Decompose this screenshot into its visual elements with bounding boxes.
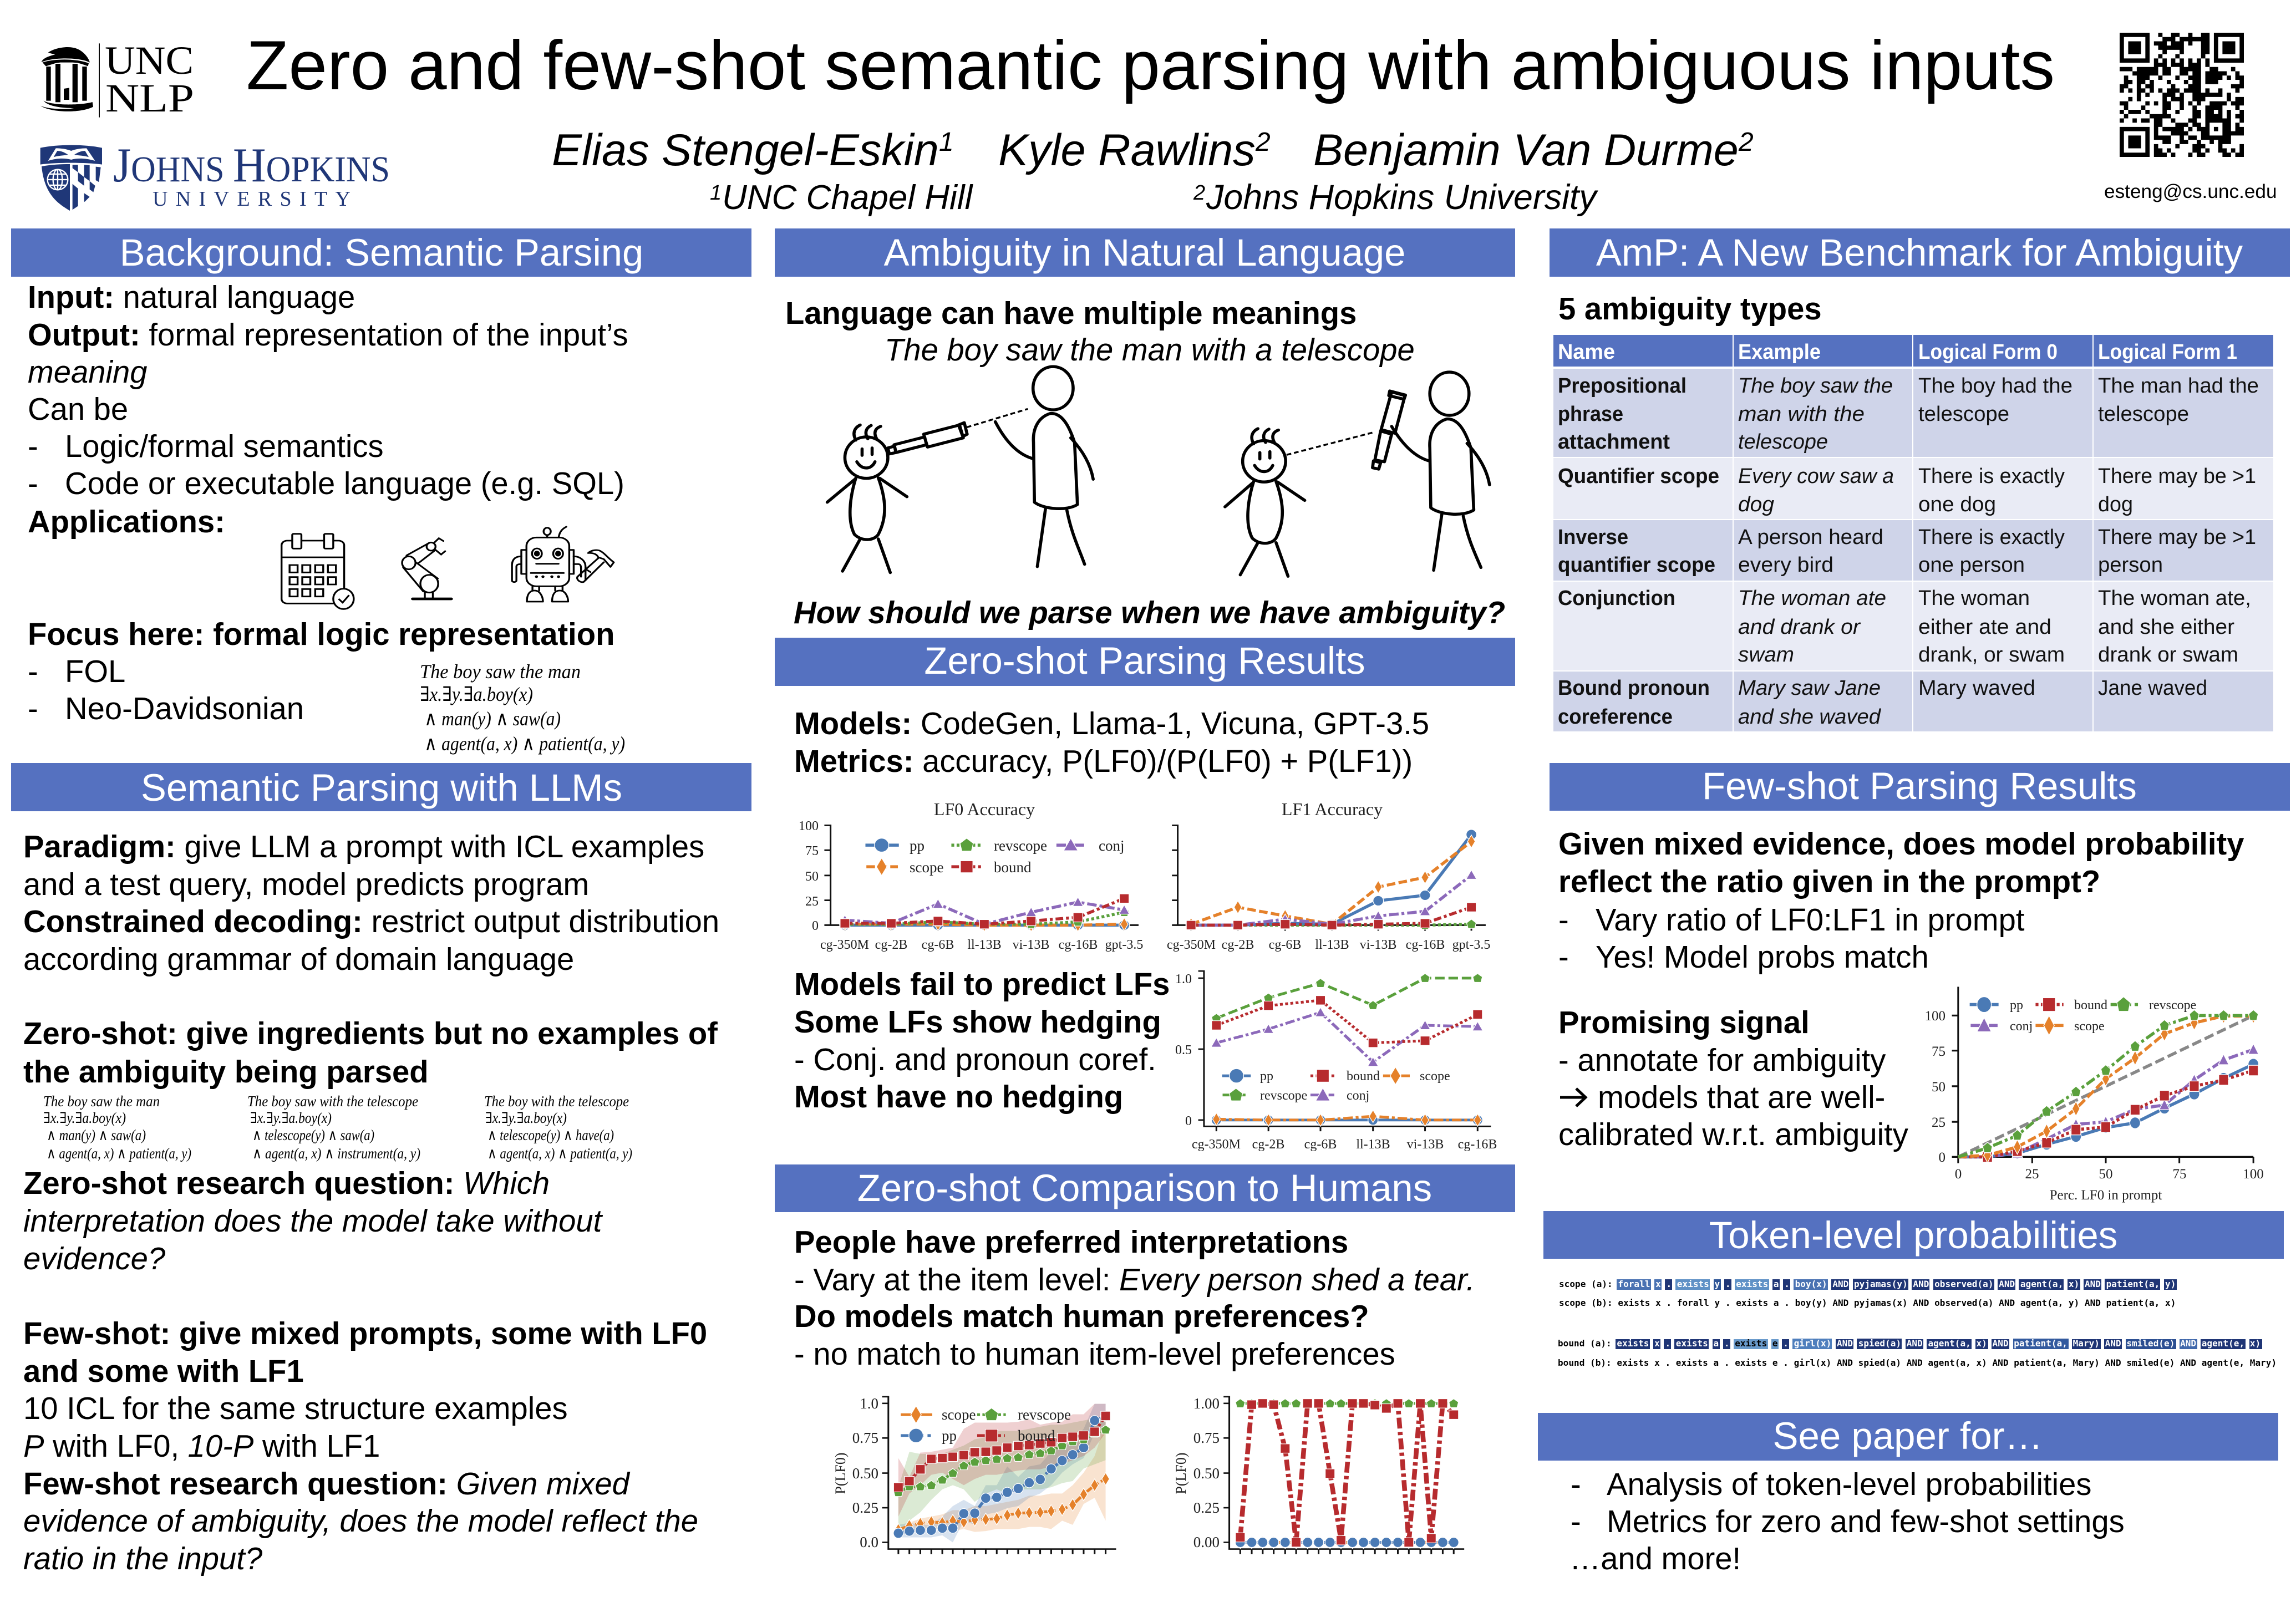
text: multiple meanings: Language can have multiple meanings xyxy=(785,296,1357,330)
chart: LF1 accuracy: ll-13B xyxy=(1315,938,1349,952)
chart: LF0 accuracy: ll-13B xyxy=(967,938,1002,952)
chart: LF1 accuracy: gpt-3.5 xyxy=(1452,938,1490,952)
table: ambiguity types: Mary waved xyxy=(1918,677,2035,700)
text block: research questions: ratio in the input? xyxy=(23,1541,263,1576)
text: list xyxy=(1569,1467,2125,1576)
text: mixed evidence question: Yes! Model probs match xyxy=(1596,939,1929,974)
table: ambiguity types: dog xyxy=(2098,493,2133,516)
chart: P(LF0) by item, single model xyxy=(1173,1395,1464,1554)
chart: hedging by model: 0.5 xyxy=(1175,1043,1192,1057)
text: models and metrics: Metrics: accuracy, P(LF0)/(P(LF0) + P(LF1)) xyxy=(794,744,1413,779)
chart: hedging by model: cg-6B xyxy=(1304,1137,1337,1152)
text block: paradigm: according grammar of domain language xyxy=(23,942,574,976)
formula: logical form: ∃x.∃y.∃a.boy(x) xyxy=(420,683,533,705)
chart: few-shot probability vs ratio: Perc. LF0 in prompt xyxy=(2050,1188,2162,1203)
heading: AmP: AmP: A New Benchmark for Ambiguity xyxy=(1596,231,2243,274)
text: mixed evidence question: Vary ratio of LF0:LF1 in prompt xyxy=(1596,902,2025,937)
heading: Semantic Parsing with LLMs: Semantic Parsing with LLMs xyxy=(141,766,622,809)
text block: zero-shot: Zero-shot: give ingredients but no examples of xyxy=(23,1016,718,1051)
table: ambiguity types: person xyxy=(2098,553,2163,577)
table: ambiguity types: and drank or xyxy=(1738,616,1861,639)
heading: Zero-shot Parsing Results: Zero-shot Parsing Results xyxy=(924,639,1365,682)
authors: 1 xyxy=(939,128,954,157)
text block: research questions: interpretation does the model take without xyxy=(23,1203,603,1238)
affiliations: Johns Hopkins University xyxy=(1206,178,1598,217)
token heatmap: bound examples: bound (a): exists x . exists a . exists e . girl(x) AND spied(a) AND agent(a, x) AND patient(a, Mary) AND smiled(e) AND agent(e, x) xyxy=(1558,1338,2261,1349)
heading: Semantic Parsing with LLMs xyxy=(11,763,751,811)
logo: UNC NLP: NLP xyxy=(105,76,194,120)
token heatmap: scope examples xyxy=(1559,1279,2177,1308)
table: ambiguity types: The boy had the xyxy=(1918,374,2073,398)
chart: P(LF0) by item, averaged: bound xyxy=(1018,1427,1055,1444)
icon: calendar xyxy=(282,534,354,609)
chart: P(LF0) by item, single model: P(LF0) xyxy=(1173,1452,1189,1494)
table: ambiguity types: Mary saw Jane xyxy=(1738,677,1881,700)
table: ambiguity types: drank, or swam xyxy=(1918,643,2065,667)
table: ambiguity types: man with the xyxy=(1738,403,1865,426)
logo: Johns Hopkins University xyxy=(40,139,390,211)
logo: Johns Hopkins University: JOHNS HOPKINS xyxy=(113,139,390,192)
token heatmap: bound examples xyxy=(1558,1338,2277,1368)
authors: Kyle Rawlins xyxy=(998,125,1256,175)
chart: few-shot probability vs ratio: 0 xyxy=(1939,1150,1945,1165)
text: findings: Most have no hedging xyxy=(794,1079,1123,1114)
chart: hedging by model: conj xyxy=(1347,1089,1369,1103)
chart: few-shot probability vs ratio: 75 xyxy=(1932,1044,1945,1059)
text: promising signal: calibrated w.r.t. ambiguity xyxy=(1558,1117,1908,1152)
chart: P(LF0) by item, averaged: 0.25 xyxy=(852,1499,878,1516)
heading: Comparison to Humans xyxy=(775,1164,1515,1212)
table: ambiguity types: drank or swam xyxy=(2098,643,2238,667)
chart: LF0 accuracy: 100 xyxy=(799,819,819,833)
table: ambiguity types: Example xyxy=(1738,340,1821,364)
icon: robot with hammer xyxy=(512,527,614,602)
heading: See paper for: See paper for… xyxy=(1772,1415,2043,1457)
chart: LF1 accuracy: cg-2B xyxy=(1222,938,1254,952)
formulas: three logical forms: ∧ agent(a, x) ∧ patient(a, y) xyxy=(47,1145,191,1162)
text: promising signal xyxy=(1558,1005,1908,1152)
text: mixed evidence question: reflect the ratio given in the prompt? xyxy=(1558,864,2100,899)
table: ambiguity types: phrase xyxy=(1558,403,1623,426)
text block: focus xyxy=(28,617,614,726)
table: ambiguity types: Inverse xyxy=(1558,526,1628,549)
text block: definitions: Can be xyxy=(28,391,128,426)
chart: LF0 accuracy: 0 xyxy=(812,919,819,933)
text: preferences xyxy=(794,1224,1475,1371)
text block: research questions xyxy=(23,1166,707,1576)
chart: LF0 accuracy: gpt-3.5 xyxy=(1105,938,1143,952)
table: ambiguity types: one dog xyxy=(1918,493,1996,516)
formulas: three logical forms: ∃x.∃y.∃a.boy(x) xyxy=(485,1110,567,1126)
chart: few-shot probability vs ratio xyxy=(1924,986,2264,1203)
affiliations: 1 xyxy=(710,181,722,205)
text: mixed evidence question: Given mixed evidence, does model probability xyxy=(1558,826,2244,861)
table: ambiguity types: attachment xyxy=(1558,430,1670,454)
table: ambiguity types: Name xyxy=(1558,340,1615,364)
formulas: three logical forms xyxy=(43,1093,632,1162)
table: ambiguity types: Logical Form 0 xyxy=(1918,340,2058,364)
formulas: three logical forms: ∧ agent(a, x) ∧ instrument(a, y) xyxy=(252,1145,420,1162)
text: mixed evidence question: - xyxy=(1558,939,1569,974)
chart: few-shot probability vs ratio: 50 xyxy=(1932,1080,1945,1095)
heading: Background: Background: Semantic Parsing xyxy=(120,231,643,274)
text: preferences: People have preferred interpretations xyxy=(794,1224,1348,1259)
chart: hedging by model: 1.0 xyxy=(1175,972,1192,986)
affiliations: 2 xyxy=(1193,181,1205,205)
text: models and metrics: Models: CodeGen, Llama-1, Vicuna, GPT-3.5 xyxy=(794,706,1429,741)
table: ambiguity types: Bound pronoun xyxy=(1558,677,1710,700)
authors: 2 xyxy=(1255,128,1271,157)
text block: focus: - xyxy=(28,691,38,726)
chart: LF0 accuracy: cg-16B xyxy=(1059,938,1098,952)
chart: P(LF0) by item, averaged: 1.0 xyxy=(860,1395,878,1412)
chart: P(LF0) by item, averaged: 0.75 xyxy=(852,1430,878,1446)
table: ambiguity types: The woman xyxy=(1918,587,2030,610)
heading: Few-shot xyxy=(1550,763,2290,811)
text block: research questions: Few-shot: give mixed prompts, some with LF0 xyxy=(23,1316,707,1351)
icon: robot arm xyxy=(402,538,451,599)
text: list: Analysis of token-level probabilities xyxy=(1607,1467,2091,1502)
panel: Ambiguity in Natural Language xyxy=(775,228,1515,630)
panel: Zero-shot Comparison to Humans xyxy=(775,1164,1515,1554)
table: ambiguity types: The woman ate, xyxy=(2098,587,2251,610)
chart: P(LF0) by item, averaged: pp xyxy=(942,1427,957,1444)
table: ambiguity types: and she either xyxy=(2098,616,2234,639)
table: ambiguity types: There may be >1 xyxy=(2098,465,2256,488)
heading: Token-level: Token-level probabilities xyxy=(1709,1214,2117,1257)
heading: Ambiguity xyxy=(775,228,1515,277)
text block: definitions: Applications: xyxy=(28,504,225,539)
text: mixed evidence question xyxy=(1558,826,2244,974)
text: findings xyxy=(794,967,1170,1114)
table: ambiguity types: either ate and xyxy=(1918,616,2051,639)
chart: P(LF0) by item, single model: 0.00 xyxy=(1193,1534,1220,1550)
chart: P(LF0) by item, averaged: revscope xyxy=(1018,1406,1071,1423)
table: ambiguity types: telescope xyxy=(1738,430,1828,454)
text: models and metrics xyxy=(794,706,1429,779)
chart: hedging by model: cg-350M xyxy=(1192,1137,1241,1152)
text block: zero-shot: the ambiguity being parsed xyxy=(23,1054,429,1089)
chart: few-shot probability vs ratio: 100 xyxy=(1924,1009,1945,1024)
text block: definitions: Input: natural language xyxy=(28,279,355,314)
text block: research questions: evidence? xyxy=(23,1241,166,1276)
text block: paradigm: and a test query, model predicts program xyxy=(23,867,589,902)
heading: Background xyxy=(11,228,751,277)
panel: Token-level probabilities xyxy=(1543,1211,2284,1368)
chart: LF0 accuracy: scope xyxy=(910,859,943,876)
formulas: three logical forms: ∧ man(y) ∧ saw(a) xyxy=(47,1127,146,1143)
formulas: three logical forms: ∃x.∃y.∃a.boy(x) xyxy=(250,1110,332,1126)
chart: LF0 accuracy: conj xyxy=(1099,837,1125,854)
table: ambiguity types: every bird xyxy=(1738,553,1833,577)
chart: few-shot probability vs ratio: bound xyxy=(2074,998,2107,1013)
chart: P(LF0) by item, averaged: 0.50 xyxy=(852,1465,878,1482)
chart: LF0 accuracy: vi-13B xyxy=(1013,938,1049,952)
text: promising signal: models that are well- xyxy=(1598,1080,1885,1115)
text: preferences: - no match to human item-level preferences xyxy=(794,1336,1395,1371)
affiliations xyxy=(710,178,1598,217)
chart: LF1 accuracy: cg-350M xyxy=(1167,938,1216,952)
table: ambiguity types: A person heard xyxy=(1738,526,1883,549)
chart: LF1 accuracy xyxy=(1167,799,1490,952)
chart: few-shot probability vs ratio: 75 xyxy=(2173,1167,2186,1182)
chart: LF0 accuracy: cg-2B xyxy=(875,938,907,952)
table: ambiguity types: quantifier scope xyxy=(1558,553,1715,577)
table: ambiguity types: coreference xyxy=(1558,705,1673,729)
chart: few-shot probability vs ratio: scope xyxy=(2074,1019,2105,1034)
chart: P(LF0) by item, averaged: scope xyxy=(942,1406,976,1423)
text: list: Metrics for zero and few-shot settings xyxy=(1607,1504,2125,1539)
text block: definitions: meaning xyxy=(28,354,148,389)
chart: P(LF0) by item, single model: 1.00 xyxy=(1193,1395,1220,1412)
text: findings: - Conj. and pronoun coref. xyxy=(794,1042,1156,1077)
text: findings: Some LFs show hedging xyxy=(794,1004,1161,1039)
chart: P(LF0) by item, averaged xyxy=(832,1395,1116,1554)
text: preferences: - Vary at the item level: Every person shed a tear. xyxy=(794,1262,1475,1297)
chart: hedging by model: scope xyxy=(1420,1069,1450,1084)
text block: zero-shot xyxy=(23,1016,718,1089)
chart: hedging by model: cg-2B xyxy=(1252,1137,1284,1152)
chart: few-shot probability vs ratio: revscope xyxy=(2149,998,2196,1013)
table: ambiguity types: Every cow saw a xyxy=(1738,465,1894,488)
arrow: leads to xyxy=(1560,1089,1586,1106)
table: ambiguity types: and she waved xyxy=(1738,705,1882,729)
heading: Zero-shot Parsing Results xyxy=(775,638,1515,686)
formulas: three logical forms: The boy saw with the telescope xyxy=(247,1093,418,1110)
text block: research questions: 10 ICL for the same structure examples xyxy=(23,1391,568,1426)
illustration: boy looks through telescope xyxy=(827,367,1093,573)
authors xyxy=(552,125,1754,175)
heading: See paper for xyxy=(1538,1413,2278,1461)
table: ambiguity types: The man had the xyxy=(2098,374,2259,398)
table: ambiguity types: swam xyxy=(1738,643,1794,667)
chart: LF1 accuracy: cg-16B xyxy=(1406,938,1445,952)
token heatmap: bound examples: bound (b): exists x . exists a . exists e . girl(x) AND spied(a) AND agent(a, x) AND patient(a, Mary) AND smiled(e) AND agent(e, Mary) xyxy=(1558,1357,2277,1368)
chart: LF0 accuracy: 25 xyxy=(805,894,819,909)
chart: few-shot probability vs ratio: 0 xyxy=(1955,1167,1962,1182)
formulas: three logical forms: ∧ telescope(y) ∧ have(a) xyxy=(487,1127,614,1143)
token heatmap: scope examples: scope (a): forall x . exists y . exists a . boy(x) AND pyjamas(y) AND observed(a) AND agent(a, x) AND patient(a, y) xyxy=(1559,1279,2176,1289)
text: 5 ambiguity types: 5 ambiguity types xyxy=(1558,291,1822,326)
chart: LF1 accuracy: cg-6B xyxy=(1269,938,1301,952)
chart: hedging by model: 0 xyxy=(1185,1114,1192,1128)
text block: definitions: Code or executable language (e.g. SQL) xyxy=(65,466,624,501)
text block: research questions: Few-shot research question: Given mixed xyxy=(23,1466,631,1501)
chart: hedging by model: revscope xyxy=(1260,1089,1307,1103)
text block: focus: - xyxy=(28,654,38,689)
chart: LF0 accuracy: bound xyxy=(994,859,1032,876)
chart: hedging by model: bound xyxy=(1347,1069,1380,1084)
chart: LF1 accuracy: vi-13B xyxy=(1360,938,1396,952)
text: example sentence: The boy saw the man with a telescope xyxy=(885,332,1415,367)
table: ambiguity types: The boy saw the xyxy=(1738,374,1893,398)
table: ambiguity types xyxy=(1553,335,2273,731)
chart: LF0 accuracy: revscope xyxy=(994,837,1047,854)
chart: hedging by model: vi-13B xyxy=(1407,1137,1444,1152)
text block: paradigm: Constrained decoding: restrict output distribution xyxy=(23,904,719,939)
table: ambiguity types: There is exactly xyxy=(1918,526,2065,549)
logo: UNC NLP: UNC xyxy=(105,38,194,83)
chart: LF0 accuracy: 50 xyxy=(805,869,819,884)
text: how should we parse: How should we parse when we have ambiguity? xyxy=(794,595,1505,630)
chart: hedging by model xyxy=(1175,971,1497,1152)
chart: few-shot probability vs ratio: 100 xyxy=(2243,1167,2264,1182)
text: findings: Models fail to predict LFs xyxy=(794,967,1170,1001)
text: promising signal: - annotate for ambiguity xyxy=(1558,1042,1886,1077)
panel: Zero-shot Parsing Results xyxy=(775,638,1515,1152)
heading: Ambiguity: Ambiguity in Natural Language xyxy=(884,231,1405,274)
table: ambiguity types: There is exactly xyxy=(1918,465,2065,488)
chart: few-shot probability vs ratio: 50 xyxy=(2099,1167,2113,1182)
email: esteng@cs.unc.edu xyxy=(2104,181,2277,202)
token heatmap: scope examples: scope (b): exists x . forall y . exists a . boy(y) AND pyjamas(x) AND observed(a) AND agent(a, y) AND patient(a, x) xyxy=(1559,1298,2176,1308)
text block: definitions: - xyxy=(28,429,38,464)
chart: LF0 accuracy: LF0 Accuracy xyxy=(934,799,1035,819)
text block: focus: Neo-Davidsonian xyxy=(65,691,304,726)
chart: P(LF0) by item, single model: 0.50 xyxy=(1193,1465,1220,1482)
heading: Token-level xyxy=(1543,1211,2284,1259)
chart: LF0 accuracy: cg-6B xyxy=(922,938,954,952)
title: Zero and few-shot semantic parsing with ambiguous inputs xyxy=(246,27,2055,104)
formulas: three logical forms: ∧ agent(a, x) ∧ patient(a, y) xyxy=(487,1145,632,1162)
chart: LF0 accuracy xyxy=(799,799,1143,952)
text: mixed evidence question: - xyxy=(1558,902,1569,937)
formula: logical form: ∧ agent(a, x) ∧ patient(a, y) xyxy=(424,733,625,755)
formulas: three logical forms: The boy saw the man xyxy=(43,1093,160,1110)
heading: Few-shot: Few-shot Parsing Results xyxy=(1702,765,2137,807)
text: list: …and more! xyxy=(1569,1541,1741,1576)
panel: Background: Semantic Parsing xyxy=(11,228,751,755)
table: ambiguity types: Conjunction xyxy=(1558,587,1675,610)
table: ambiguity types: telescope xyxy=(2098,403,2189,426)
chart: hedging by model: ll-13B xyxy=(1356,1137,1390,1152)
text: promising signal: Promising signal xyxy=(1558,1005,1810,1040)
text block: focus: FOL xyxy=(65,654,125,689)
formulas: three logical forms: The boy with the telescope xyxy=(484,1093,629,1110)
chart: P(LF0) by item, averaged: P(LF0) xyxy=(832,1452,849,1494)
chart: few-shot probability vs ratio: pp xyxy=(2010,998,2023,1013)
chart: hedging by model: pp xyxy=(1260,1069,1273,1084)
chart: P(LF0) by item, averaged: 0.0 xyxy=(860,1534,878,1550)
logo: Johns Hopkins University: UNIVERSITY xyxy=(153,187,351,211)
heading: Comparison to Humans: Zero-shot Comparison to Humans xyxy=(857,1167,1432,1209)
table: ambiguity types: The woman ate xyxy=(1738,587,1886,610)
formulas: three logical forms: ∧ telescope(y) ∧ saw(a) xyxy=(252,1127,374,1143)
chart: LF1 accuracy: LF1 Accuracy xyxy=(1282,799,1383,819)
chart: P(LF0) by item, single model: 0.25 xyxy=(1193,1499,1220,1516)
table: ambiguity types: Prepositional xyxy=(1558,374,1687,398)
table: ambiguity types: Jane waved xyxy=(2098,677,2207,700)
chart: P(LF0) by item, single model: 0.75 xyxy=(1193,1430,1220,1446)
text block: focus: Focus here: formal logic representation xyxy=(28,617,614,652)
text block: research questions: and some with LF1 xyxy=(23,1354,304,1389)
logo: UNC NLP xyxy=(40,38,194,120)
authors: Benjamin Van Durme xyxy=(1313,125,1739,175)
table: ambiguity types: There may be >1 xyxy=(2098,526,2256,549)
text: preferences: Do models match human preferences? xyxy=(794,1299,1369,1334)
text block: paradigm: Paradigm: give LLM a prompt with ICL examples xyxy=(23,829,704,864)
table: ambiguity types: Quantifier scope xyxy=(1558,465,1719,488)
text: list: - xyxy=(1571,1504,1581,1539)
formulas: three logical forms: ∃x.∃y.∃a.boy(x) xyxy=(43,1110,126,1126)
text block: definitions: Logic/formal semantics xyxy=(65,429,384,464)
text block: research questions: evidence of ambiguity, does the model reflect the xyxy=(23,1503,698,1538)
table: ambiguity types: telescope xyxy=(1918,403,2009,426)
chart: LF0 accuracy: cg-350M xyxy=(820,938,869,952)
table: ambiguity types: one person xyxy=(1918,553,2025,577)
illustration: man holds telescope xyxy=(1225,372,1490,576)
panel: AmP benchmark xyxy=(1550,228,2290,731)
chart: few-shot probability vs ratio: conj xyxy=(2010,1019,2033,1034)
table: ambiguity types: dog xyxy=(1738,493,1774,516)
affiliations: UNC Chapel Hill xyxy=(722,179,974,217)
text: list: - xyxy=(1571,1467,1581,1502)
chart: LF0 accuracy: 75 xyxy=(805,844,819,858)
text block: paradigm xyxy=(23,829,719,976)
text block: research questions: P with LF0, 10-P with LF1 xyxy=(23,1428,380,1463)
text block: definitions: - xyxy=(28,466,38,501)
text block: definitions: Output: formal representation of the input’s xyxy=(28,317,628,352)
chart: hedging by model: cg-16B xyxy=(1458,1137,1497,1152)
chart: few-shot probability vs ratio: 25 xyxy=(1932,1115,1945,1130)
chart: LF0 accuracy: pp xyxy=(910,837,925,854)
text block: definitions xyxy=(28,279,628,539)
authors: 2 xyxy=(1738,128,1754,157)
panel: Few-shot Parsing Results xyxy=(1550,763,2290,1203)
formula: logical form: The boy saw the man xyxy=(420,660,581,683)
authors: Elias Stengel-Eskin xyxy=(552,125,939,175)
QR code xyxy=(2120,35,2244,155)
text block: research questions: Zero-shot research question: Which xyxy=(23,1166,550,1201)
formula: logical form xyxy=(420,660,625,755)
chart: few-shot probability vs ratio: 25 xyxy=(2025,1167,2039,1182)
table: ambiguity types: Logical Form 1 xyxy=(2098,340,2237,364)
panel: Semantic Parsing with LLMs xyxy=(11,763,751,1576)
panel: See paper for xyxy=(1538,1413,2278,1576)
formula: logical form: ∧ man(y) ∧ saw(a) xyxy=(424,708,561,730)
